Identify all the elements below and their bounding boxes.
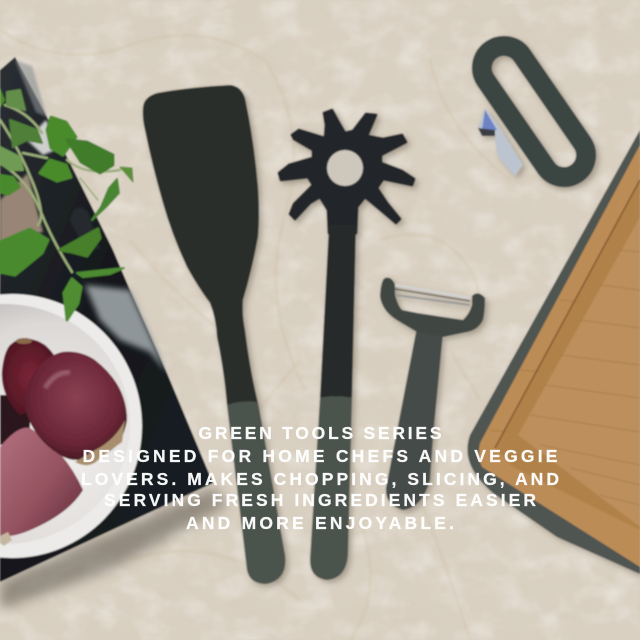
caption line 2: LOVERS. MAKES CHOPPING, SLICING, AND: [81, 469, 559, 489]
pasta server handle grip: [310, 396, 352, 580]
pasta server head: [279, 110, 414, 233]
leaf: large left: [0, 229, 48, 275]
leaf: edge: [0, 88, 5, 108]
pasta server stem: [320, 225, 356, 398]
bowl with red onions: [0, 294, 142, 558]
onion: cut bottom: [0, 428, 83, 536]
caption line 4: AND MORE ENJOYABLE.: [186, 513, 454, 533]
leaf: curled: [92, 179, 119, 220]
peeler handle: [386, 327, 443, 510]
tool: oval can opener: [473, 37, 595, 186]
leaf: long right: [67, 140, 113, 173]
leaf: top: [7, 90, 25, 110]
cutting board: [467, 130, 640, 574]
pot: beige container behind herbs: [0, 173, 43, 242]
spatula handle grip: [227, 401, 285, 584]
caption heading: GREEN TOOLS SERIES: [198, 423, 442, 443]
shadow under slab: [0, 487, 228, 610]
leaf: right of stem: [60, 229, 100, 256]
opener ring: [473, 37, 595, 186]
herb: basil sprig: [0, 88, 133, 320]
slab: dark marble board: [0, 57, 213, 582]
leaf: centre: [40, 160, 71, 181]
onion: top: [2, 338, 58, 415]
leaf: small left: [0, 175, 20, 195]
peeler blade: [395, 285, 470, 305]
caption line 1: DESIGNED FOR HOME CHEFS AND VEGGIE: [82, 446, 557, 466]
leaf: lower hanging: [64, 279, 81, 320]
pasta server hole: [327, 150, 363, 186]
leaf: upper: [47, 117, 76, 155]
leaf: thin tip: [77, 268, 124, 277]
peeler head: [380, 278, 485, 337]
onion: large centre: [25, 352, 127, 460]
tool: spatula: [143, 85, 285, 584]
leaf: pale left: [0, 147, 23, 170]
spatula head and neck: [143, 85, 259, 405]
caption: green tools series: [81, 423, 559, 533]
board juice groove: [495, 180, 640, 530]
tool: pasta server: [279, 110, 414, 580]
leaf: dark top: [10, 120, 42, 147]
opener metal clip: [478, 108, 523, 176]
tool: vegetable peeler: [380, 278, 485, 510]
caption line 3: SERVING FRESH INGREDIENTS EASIER: [104, 490, 536, 510]
leaf: small tip: [120, 167, 133, 182]
